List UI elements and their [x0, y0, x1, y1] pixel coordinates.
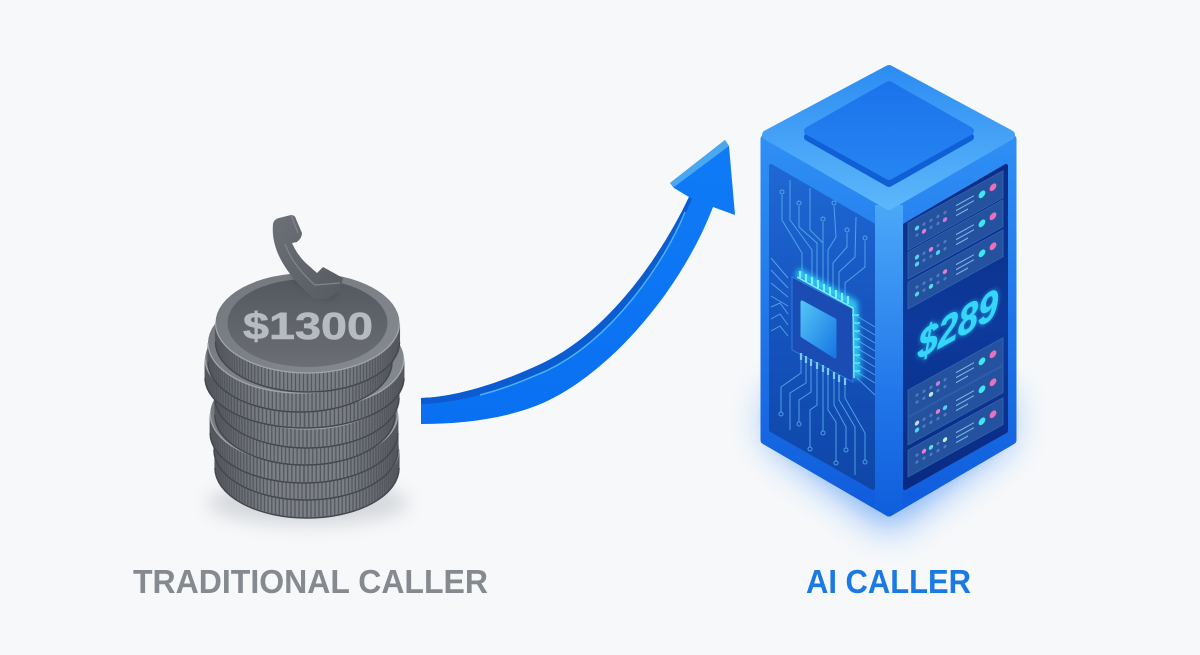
price: $289: $289: [917, 279, 998, 370]
price: $1300: $1300: [243, 306, 373, 348]
glow under server: [770, 395, 1008, 530]
circuit panel: [771, 166, 875, 488]
growth arrow: [421, 140, 735, 424]
server left face: [765, 139, 889, 512]
circuit traces: [771, 180, 875, 475]
top plate: [808, 85, 970, 183]
rack unit 6: [908, 398, 1003, 477]
coin face: [228, 279, 388, 367]
label: AI caller: AI CALLER: [806, 563, 971, 600]
server right face: [889, 139, 1012, 512]
coin stack: traditional caller cost: [205, 215, 408, 525]
rack unit 2: [908, 200, 1003, 279]
icon: telephone handset: [273, 215, 343, 300]
AI server tower: [765, 70, 1012, 530]
label: traditional caller: TRADITIONAL CALLER: [133, 563, 488, 600]
server front corner: [875, 205, 903, 515]
chip top pins: [800, 271, 848, 304]
chip body: [792, 277, 853, 382]
chip right pins: [852, 315, 860, 371]
chip bottom pins: [801, 353, 845, 385]
server top face: [767, 70, 1010, 205]
rack unit 3: [908, 230, 1003, 309]
rack unit 5: [908, 366, 1003, 445]
price: $289: $289: [917, 279, 998, 370]
rack unit 1: [908, 171, 1003, 250]
chip glow: [797, 272, 857, 378]
rack unit 4: [908, 338, 1003, 417]
server rack panel: [905, 166, 1006, 488]
chip core: [802, 302, 835, 357]
